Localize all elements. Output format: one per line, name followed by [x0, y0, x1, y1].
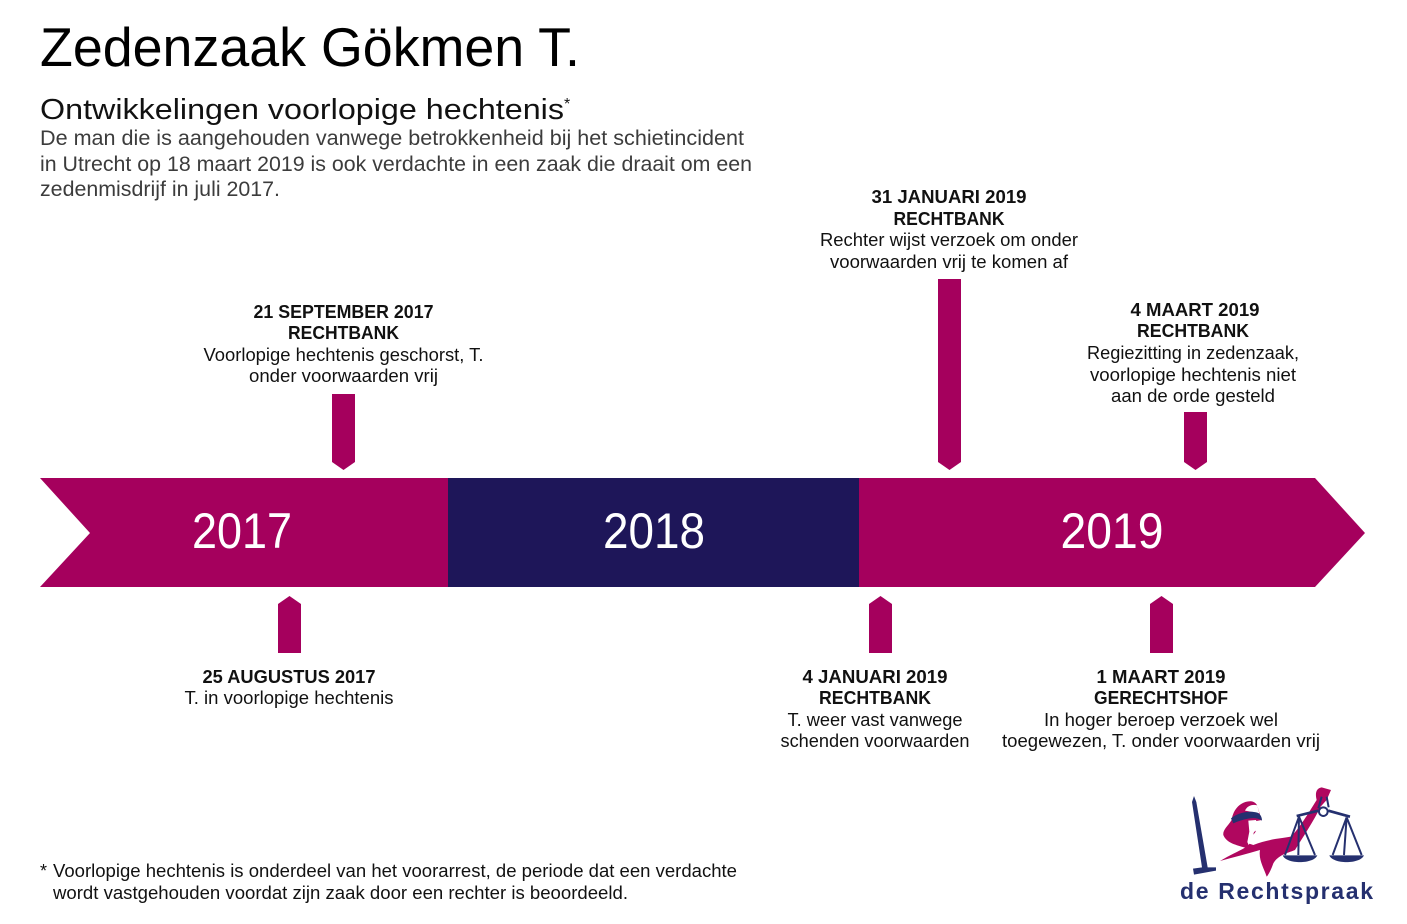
intro text: De man die is aangehouden vanwege betrokkenheid bij het schietincident — [40, 127, 744, 150]
segment: 2019: 2019 — [1060, 503, 1164, 559]
event: 4 januari 2019: 4 JANUARI 2019 — [802, 667, 948, 687]
event: 25 augustus 2017 — [184, 596, 394, 708]
event: 1 maart 2019: 1 MAART 2019 — [1096, 667, 1226, 687]
icon: scales — [1285, 797, 1362, 855]
event: 1 maart 2019 — [1002, 596, 1320, 751]
event: 4 januari 2019: T. weer vast vanwege — [788, 710, 962, 730]
intro text: in Utrecht op 18 maart 2019 is ook verdachte in een zaak die draait om een — [40, 153, 752, 176]
event: 25 augustus 2017: T. in voorlopige hechtenis — [184, 688, 394, 708]
title: Zedenzaak Gökmen T. — [40, 16, 580, 78]
event: 4 maart 2019: Regiezitting in zedenzaak, — [1087, 343, 1299, 363]
event: 31 januari 2019: 31 JANUARI 2019 — [872, 187, 1026, 207]
footnote: wordt vastgehouden voordat zijn zaak door een rechter is beoordeeld. — [52, 883, 628, 903]
segment: 2018 — [448, 478, 859, 587]
footnote: Voorlopige hechtenis is onderdeel van het voorarrest, de periode dat een verdachte — [53, 861, 737, 881]
event: 31 januari 2019 — [820, 187, 1078, 470]
footnote: * — [40, 861, 47, 881]
segment: 2019 — [859, 478, 1365, 587]
event: 4 maart 2019: aan de orde gesteld — [1111, 386, 1275, 406]
segment: 2017: 2017 — [192, 503, 292, 559]
logo: de Rechtspraak — [1180, 787, 1373, 904]
intro text — [40, 127, 752, 201]
event: 21 september 2017: RECHTBANK — [288, 323, 399, 343]
event: 21 september 2017: onder voorwaarden vrij — [249, 366, 438, 386]
event: 4 maart 2019: RECHTBANK — [1137, 321, 1249, 341]
event: 4 maart 2019: voorlopige hechtenis niet — [1090, 365, 1296, 385]
event: 4 januari 2019: RECHTBANK — [819, 688, 931, 708]
event: 4 maart 2019: 4 MAART 2019 — [1130, 300, 1260, 320]
intro text: zedenmisdrijf in juli 2017. — [40, 178, 280, 201]
event: 21 september 2017: 21 SEPTEMBER 2017 — [254, 302, 434, 322]
event: 31 januari 2019: voorwaarden vrij te komen af — [830, 252, 1069, 272]
event: 31 januari 2019: RECHTBANK — [894, 209, 1004, 229]
segment: 2018: 2018 — [603, 503, 705, 559]
segment: 2017 — [40, 478, 448, 587]
timeline arrow — [40, 478, 1365, 587]
event: 25 augustus 2017: 25 AUGUSTUS 2017 — [202, 667, 376, 687]
icon: hair highlight — [1245, 805, 1259, 813]
event: 1 maart 2019: In hoger beroep verzoek wel — [1044, 710, 1278, 730]
subtitle: * — [564, 96, 570, 113]
icon: blindfold — [1231, 812, 1262, 823]
event: 4 januari 2019: schenden voorwaarden — [780, 731, 970, 751]
icon: face — [1247, 820, 1259, 845]
event: 21 september 2017 — [204, 302, 484, 470]
icon: sword — [1192, 796, 1216, 875]
event: 21 september 2017: Voorlopige hechtenis geschorst, T. — [204, 345, 484, 365]
footnote — [40, 861, 737, 903]
event: 31 januari 2019: Rechter wijst verzoek om onder — [820, 230, 1078, 250]
logo: de Rechtspraak: de Rechtspraak — [1180, 878, 1373, 904]
event: 4 maart 2019 — [1087, 300, 1299, 470]
event: 1 maart 2019: GERECHTSHOF — [1094, 688, 1228, 708]
subtitle: Ontwikkelingen voorlopige hechtenis — [40, 94, 564, 126]
event: 1 maart 2019: toegewezen, T. onder voorwaarden vrij — [1002, 731, 1320, 751]
icon: justitia figure — [1220, 787, 1331, 877]
event: 4 januari 2019 — [780, 596, 970, 751]
